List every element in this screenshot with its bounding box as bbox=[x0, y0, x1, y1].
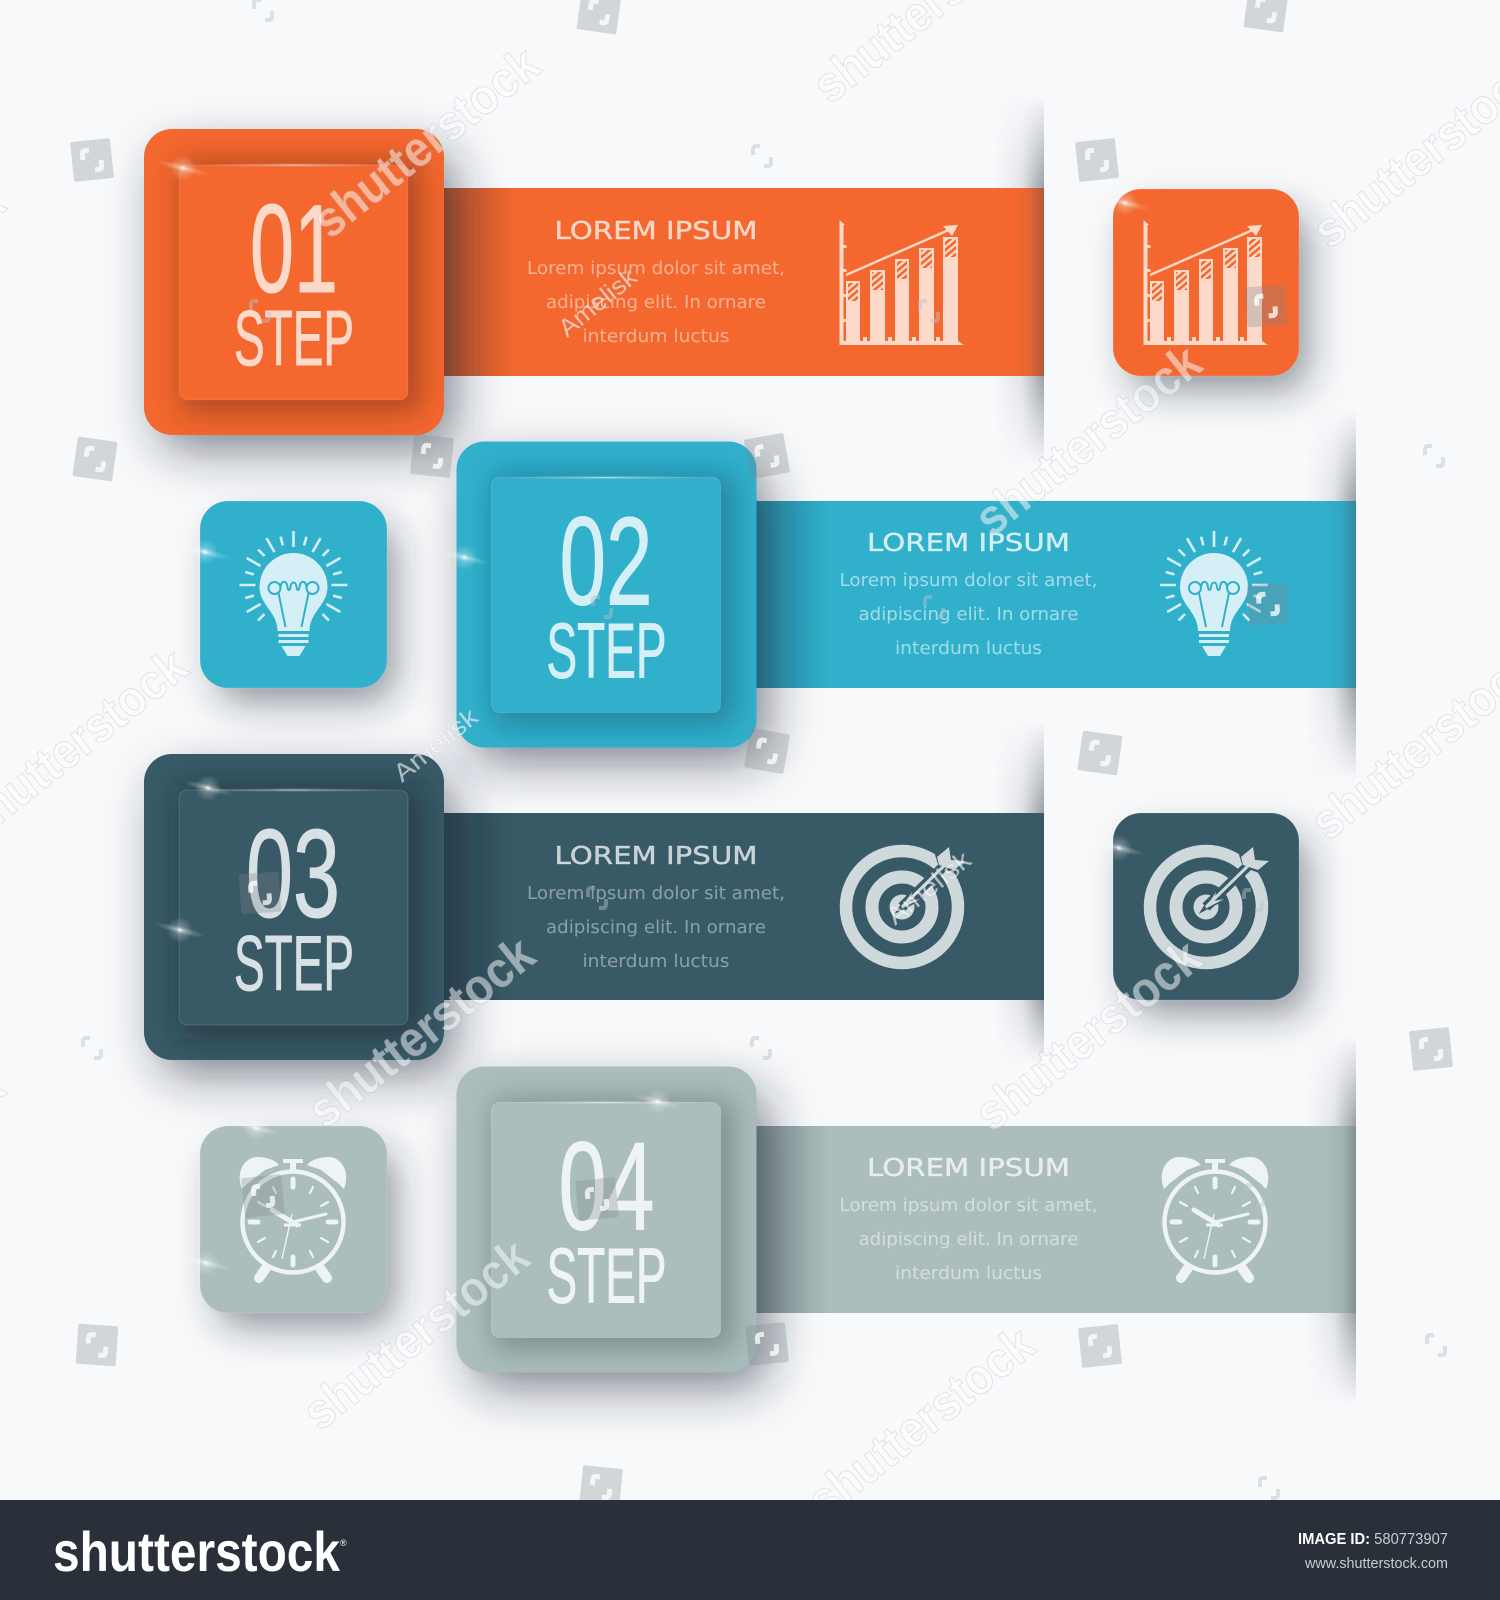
number 02: 02 bbox=[560, 492, 652, 632]
text block: step 1: Lorem ipsum dolor sit amet, bbox=[527, 258, 785, 279]
icon: light bulb in ribbon bbox=[1160, 531, 1268, 656]
text block: step 2: interdum luctus bbox=[895, 638, 1042, 659]
step tile 03 bbox=[144, 754, 456, 1076]
small icon tile: clock bbox=[180, 1115, 396, 1328]
ribbon: step 2 bbox=[756, 501, 1356, 688]
text block: step 3: interdum luctus bbox=[582, 951, 730, 972]
small icon tile: chart bbox=[1099, 189, 1309, 391]
text block: step 4 bbox=[840, 1195, 1098, 1284]
watermark: diagonal text: Amelisk bbox=[388, 703, 484, 788]
watermark: diagonal text: shutterstock bbox=[302, 35, 550, 249]
text block: step 1 bbox=[527, 258, 785, 347]
heading: step 1: LOREM IPSUM bbox=[554, 216, 758, 245]
text block: step 1: interdum luctus bbox=[582, 326, 730, 347]
panel: step 4 row bbox=[180, 1066, 1356, 1388]
icon: alarm clock in ribbon bbox=[1162, 1157, 1268, 1278]
text block: step 1: adipiscing elit. In ornare bbox=[546, 292, 766, 313]
registered mark: ® bbox=[340, 1538, 347, 1548]
image id: IMAGE ID: 580773907 bbox=[1298, 1531, 1448, 1548]
panel: step 3 row bbox=[144, 754, 1309, 1076]
text block: step 4: adipiscing elit. In ornare bbox=[858, 1229, 1078, 1250]
footer logo wordmark: shutterstock bbox=[53, 1520, 341, 1583]
label STEP: STEP bbox=[234, 919, 354, 1007]
ribbon: step 3 bbox=[444, 813, 1044, 1000]
step tile 04 bbox=[456, 1066, 768, 1388]
label STEP: STEP bbox=[546, 606, 666, 694]
watermark: diagonal text: Amelisk bbox=[553, 263, 643, 343]
text block: step 3: adipiscing elit. In ornare bbox=[546, 917, 766, 938]
text block: step 3: Lorem ipsum dolor sit amet, bbox=[527, 883, 785, 904]
footer bar bbox=[0, 1500, 1500, 1600]
step tile 01 bbox=[144, 129, 456, 451]
watermark: diagonal text: Amelisk bbox=[881, 846, 977, 931]
label STEP: STEP bbox=[546, 1232, 666, 1320]
heading: step 3: LOREM IPSUM bbox=[554, 841, 758, 870]
ribbon: step 4 bbox=[756, 1126, 1356, 1313]
text block: step 3 bbox=[527, 883, 785, 972]
text block: step 4: Lorem ipsum dolor sit amet, bbox=[840, 1195, 1098, 1216]
text block: step 2 bbox=[840, 570, 1098, 659]
text block: step 4: interdum luctus bbox=[895, 1263, 1042, 1284]
watermark: diagonal text: shutterstock bbox=[297, 925, 545, 1139]
watermark: diagonal text: shutterstock bbox=[964, 928, 1212, 1142]
small icon tile: bulb bbox=[179, 501, 396, 703]
panel: folded background shadows bbox=[994, 95, 1356, 1405]
number 03: 03 bbox=[246, 805, 340, 944]
watermark: diagonal text: shutterstock bbox=[964, 333, 1212, 547]
website: www.shutterstock.com bbox=[1304, 1555, 1448, 1572]
small icon tile: target bbox=[1093, 813, 1309, 1015]
number 04: 04 bbox=[558, 1118, 654, 1256]
icon: bar chart in ribbon bbox=[840, 220, 964, 345]
heading: step 4: LOREM IPSUM bbox=[867, 1153, 1070, 1182]
panel: step 2 row bbox=[179, 442, 1356, 764]
label STEP: STEP bbox=[234, 294, 354, 382]
text block: step 2: Lorem ipsum dolor sit amet, bbox=[840, 570, 1098, 591]
icon: target in ribbon bbox=[846, 844, 969, 963]
panel: step 1 row bbox=[144, 129, 1309, 451]
ribbon: step 1 bbox=[444, 188, 1044, 376]
text block: step 2: adipiscing elit. In ornare bbox=[858, 604, 1078, 625]
watermark: diagonal text: shutterstock bbox=[797, 1315, 1045, 1529]
heading: step 2: LOREM IPSUM bbox=[867, 528, 1070, 557]
number 01: 01 bbox=[250, 180, 338, 319]
watermark: diagonal text: shutterstock bbox=[292, 1227, 540, 1441]
step tile 02 bbox=[438, 442, 768, 764]
